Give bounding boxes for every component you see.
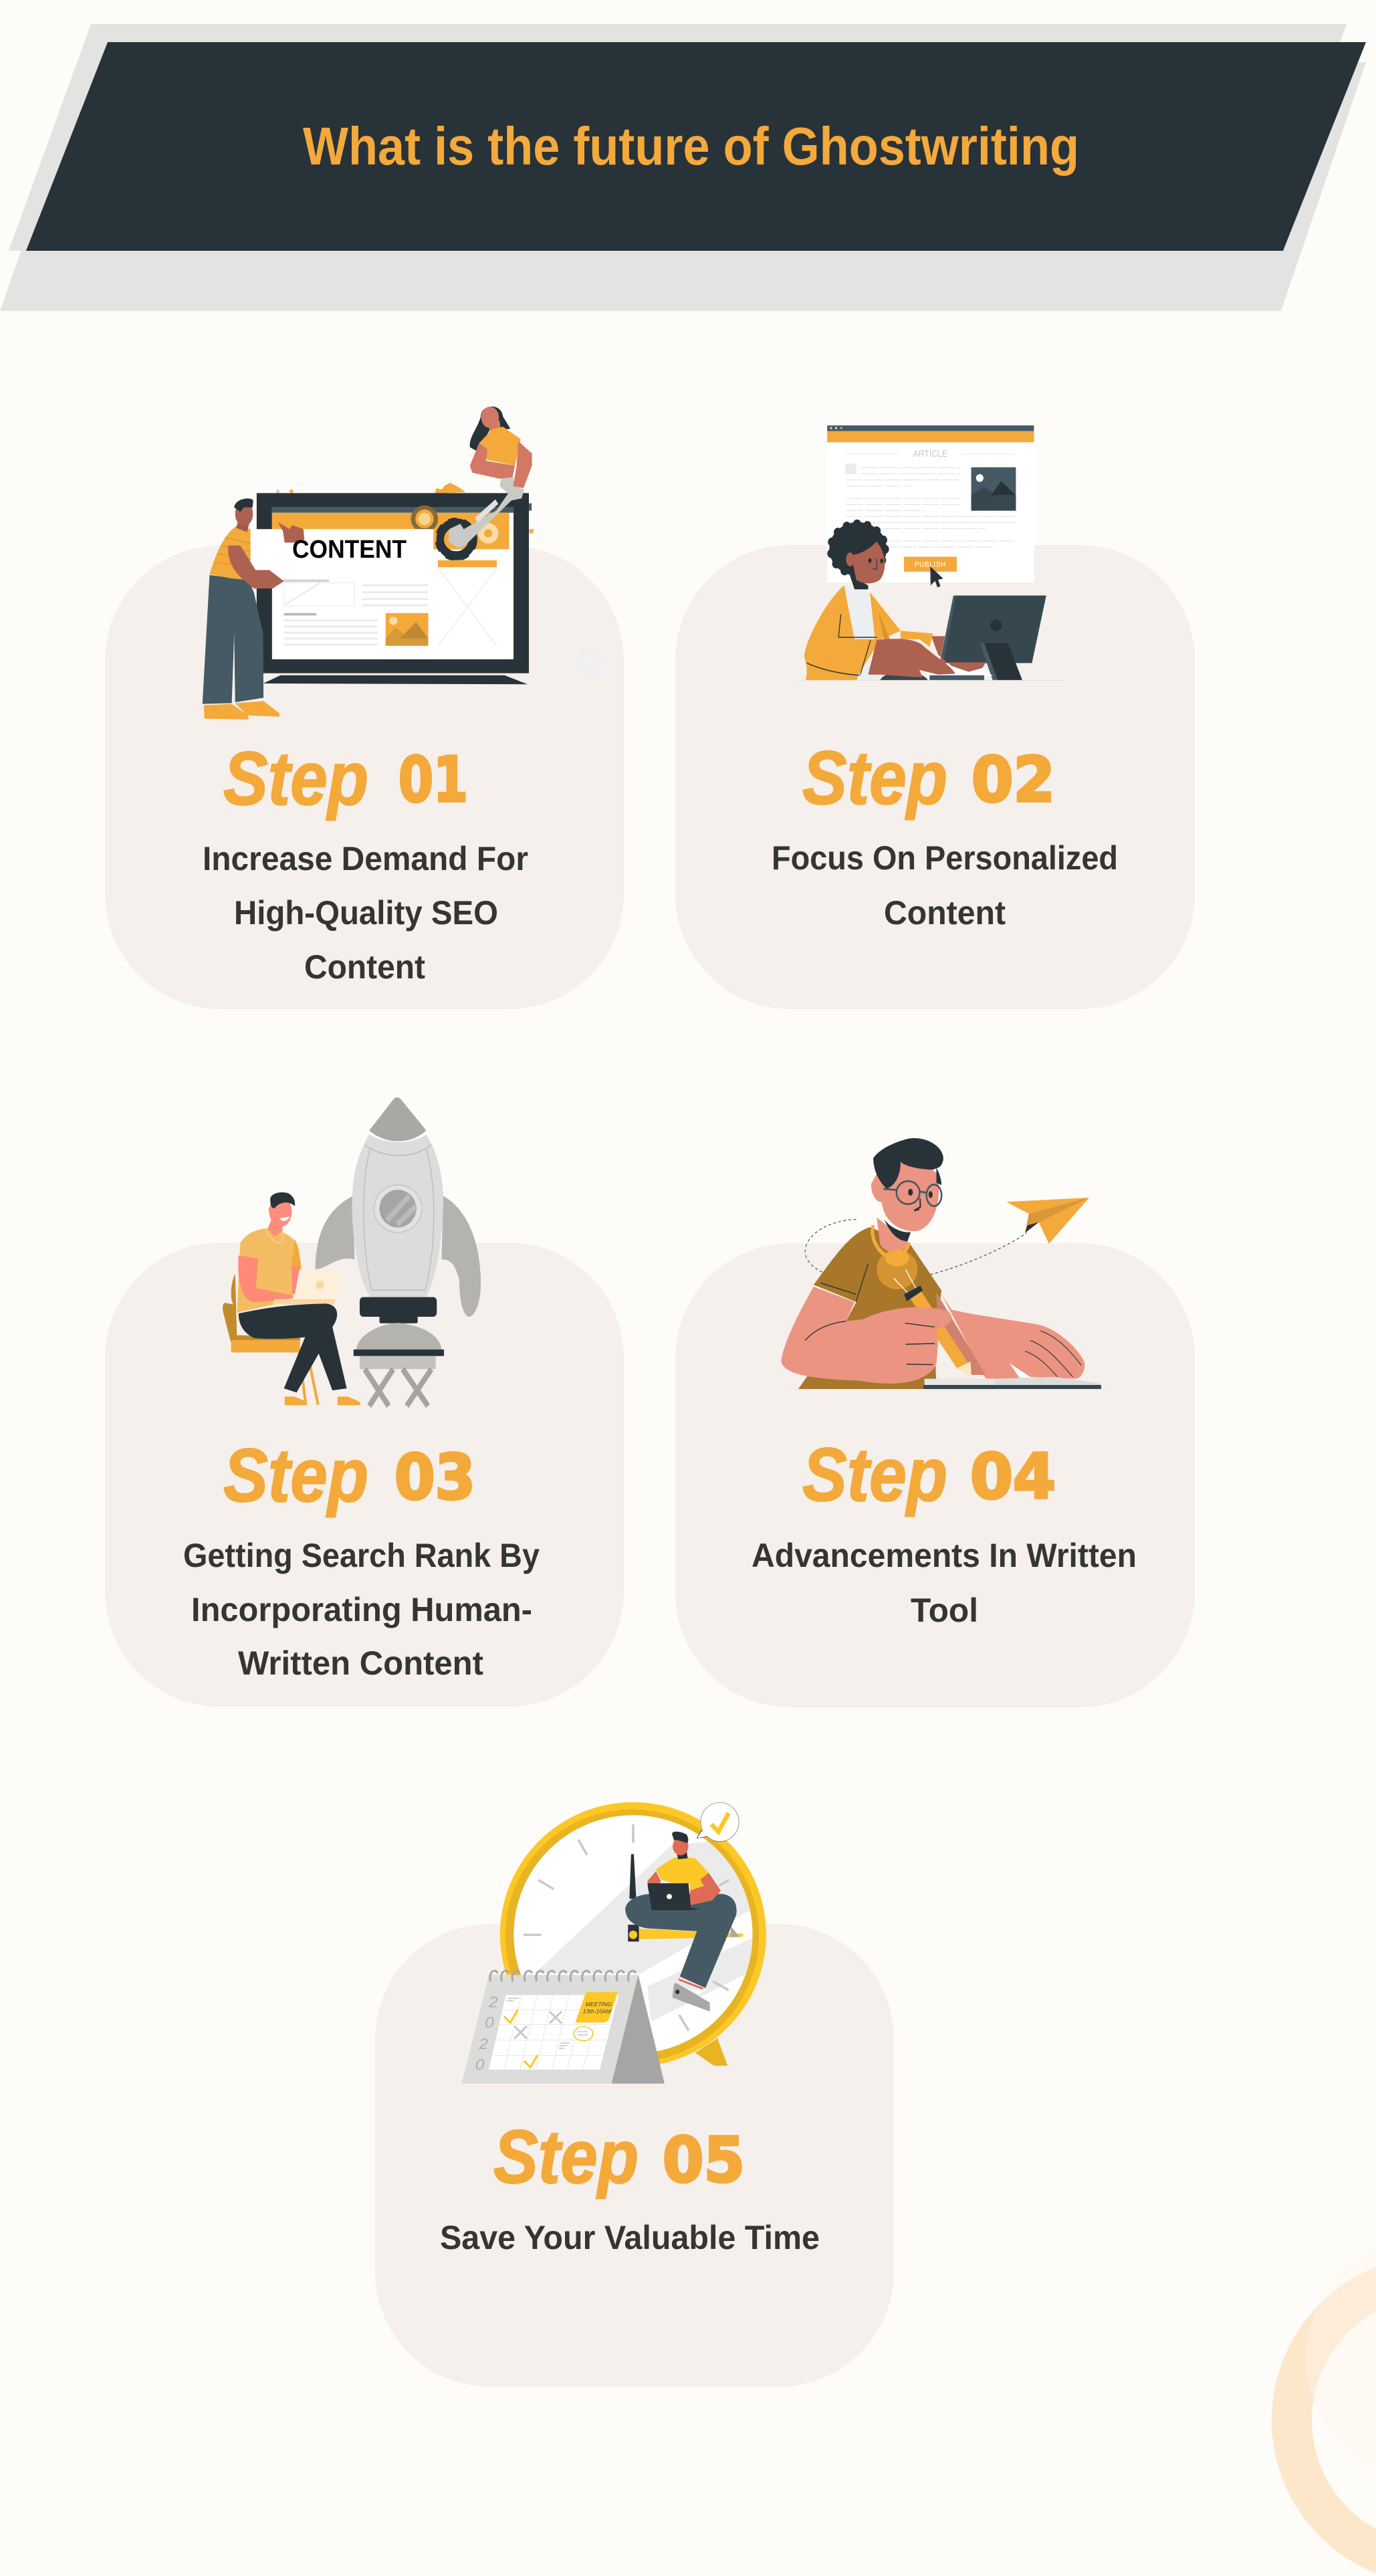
- card 5 background: [375, 1924, 894, 2387]
- step 04 description: [752, 1537, 1137, 1629]
- step 04 heading: [802, 1432, 1056, 1517]
- illustration: man on clock with calendar: 13th-10AM: [583, 2008, 612, 2014]
- illustration: man on clock with calendar: 2: [488, 1994, 498, 2012]
- step 05 heading: Step: [493, 2115, 639, 2199]
- content label on sheet: CONTENT: [292, 536, 407, 564]
- step 02 description: [772, 839, 1118, 932]
- step 04 description: Tool: [911, 1592, 978, 1629]
- step 05 description: Save Your Valuable Time: [440, 2219, 820, 2256]
- step 01 description: Content: [304, 948, 425, 986]
- step 05 heading: 05: [663, 2124, 745, 2196]
- step 03 heading: Step: [223, 1433, 368, 1517]
- card 3 background: [105, 1243, 624, 1707]
- step 01 heading: 01: [398, 744, 468, 816]
- step 03 heading: [223, 1433, 475, 1517]
- illustration: person with laptop and rocket: [223, 1097, 481, 1406]
- step 04 heading: 04: [970, 1440, 1056, 1513]
- banner dark panel: [26, 42, 1366, 251]
- step 01 heading: Step: [223, 736, 368, 821]
- panel: step 03: [105, 1097, 624, 1707]
- step 03 description: Incorporating Human-: [191, 1591, 532, 1628]
- step 02 heading: 02: [971, 744, 1055, 816]
- illustration: man on clock with calendar: 2: [478, 2036, 488, 2053]
- decorative rings: bottom right: [1272, 2238, 1376, 2576]
- card 4 background: [675, 1243, 1195, 1707]
- step 03 heading: 03: [394, 1441, 475, 1513]
- step 04 heading: Step: [802, 1432, 947, 1517]
- illustration: man on clock with calendar: MEETING: [586, 2001, 612, 2008]
- illustration: person publishing an article: ARTICLE: [913, 449, 947, 459]
- step 02 description: Focus On Personalized: [772, 839, 1118, 877]
- illustration: person publishing an article: PUBLISH: [915, 560, 946, 569]
- illustration: man on clock with calendar: 0: [475, 2056, 485, 2074]
- illustration: people fixing content on monitor: [203, 407, 534, 720]
- panel: step 01: [105, 407, 624, 1009]
- illustration: person publishing an article: [796, 425, 1064, 680]
- step 02 heading: Step: [802, 736, 947, 820]
- step 02 heading: [802, 736, 1055, 820]
- step 01 heading: [223, 736, 468, 821]
- title banner: [0, 24, 1366, 311]
- illustration: man on clock with calendar: 0: [485, 2014, 494, 2032]
- illustration: man on clock with calendar: [461, 1802, 766, 2084]
- step 01 description: High-Quality SEO: [234, 894, 498, 932]
- panel: step 04: [675, 1138, 1195, 1707]
- banner shadow lower: [0, 62, 1366, 311]
- card 1 background: [105, 546, 624, 1009]
- step 01 description: Increase Demand For: [203, 840, 528, 877]
- step 03 description: Written Content: [238, 1644, 483, 1682]
- step 03 description: Getting Search Rank By: [183, 1537, 540, 1574]
- step 04 description: Advancements In Written: [752, 1537, 1137, 1574]
- step 03 description: [183, 1537, 540, 1682]
- title: What is the future of Ghostwriting: [303, 116, 1079, 176]
- illustration: man writing with idea bulb and paper plane: [781, 1138, 1107, 1389]
- icon: faint gear: [578, 649, 604, 675]
- step 01 description: [203, 840, 528, 986]
- panel: step 02: [675, 425, 1195, 1009]
- step 05 heading: [493, 2115, 745, 2199]
- panel: step 05: [375, 1802, 894, 2387]
- card 2 background: [675, 545, 1195, 1009]
- step 02 description: Content: [884, 894, 1006, 932]
- banner shadow back: [9, 24, 1347, 251]
